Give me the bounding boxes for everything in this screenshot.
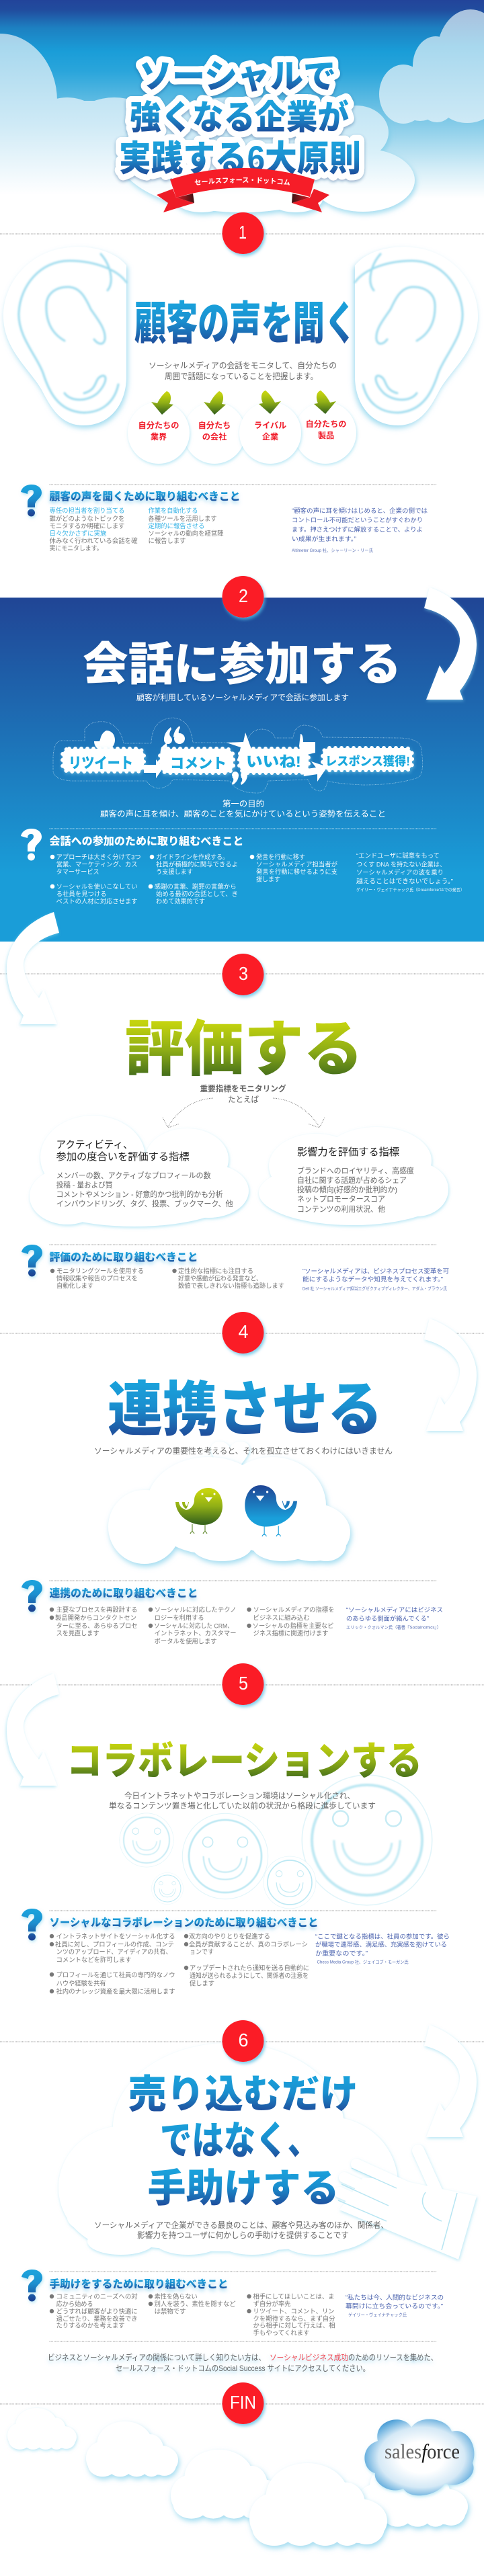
- section 6 intro: 影響力を持つユーザに何かしらの手助けを提供することです: [137, 2231, 349, 2240]
- text: activity metrics: [56, 1139, 233, 1208]
- heading: section 1 actions: 顧客の声を聞くために取り組むべきこと: [50, 490, 241, 503]
- text: section 3 actions: 情報収集や報告のプロセスを: [56, 1274, 138, 1282]
- text: section 1 actions: 専任の担当者を割り当てる: [50, 507, 125, 514]
- text: influence metrics: 自社に関する話題が占めるシェア: [297, 1175, 407, 1185]
- text: section 4 actions: ソーシャルに対応した CRM、: [154, 1622, 233, 1629]
- text: section 6 actions: 応から始める: [56, 2300, 93, 2308]
- section 6 title: 手助けする: [148, 2167, 339, 2210]
- section 5 intro: 今日イントラネットやコラボレーション環境はソーシャル化され、: [124, 1791, 355, 1800]
- text: section 5 actions: アップデートされたら通知を送る自動的に: [190, 1964, 309, 1972]
- text: section 4 actions: 主要なプロセスを再設計する: [56, 1606, 138, 1613]
- quote: Dell: 能にするようなデータや知見を与えてくれます。”: [302, 1276, 443, 1282]
- text: section 5 actions: イントラネットサイトをソーシャル化する: [56, 1933, 175, 1940]
- text: section 1 actions: 各種ツールを活用します: [148, 515, 216, 522]
- text: influence metrics: ブランドへのロイヤリティ、高感度: [297, 1166, 414, 1175]
- text: section 1 actions: [50, 507, 223, 552]
- number badge 2: 2: [239, 585, 248, 606]
- text: activity metrics: コメントやメンション - 好意的かつ批判的かも分析: [56, 1190, 223, 1199]
- cloud: header left: [0, 34, 175, 218]
- section 3 intro: たとえば: [228, 1095, 259, 1104]
- quote: Altimeter: “顧客の声に耳を傾けはじめると、企業の側では: [292, 507, 428, 514]
- section 1 intro: 周囲で話題になっていることを把握します。: [165, 372, 318, 381]
- main title: ソーシャルで: [139, 58, 336, 95]
- primary goal: [100, 799, 386, 819]
- text: section 2 actions: る社員を見つける: [56, 890, 107, 898]
- ear: left: [3, 247, 126, 425]
- cloud: header right: [379, 9, 484, 124]
- icon: question mark 2: [21, 829, 42, 860]
- text: section 5 actions: ハウや経験を共有: [56, 1980, 106, 1987]
- quote: Qualman: のあらゆる側面が絡んでくる”: [346, 1614, 429, 1622]
- quote: Qualman: エリック・クォルマン氏（著書『Socialnomics』）: [346, 1624, 441, 1630]
- bubbles: monitoring targets: [128, 402, 356, 464]
- text: section 4 actions: ソーシャルメディアの指標を: [253, 1606, 335, 1613]
- text: section 4 actions: ビジネスに組み込む: [253, 1614, 309, 1621]
- cloud: footer 3: [171, 2450, 286, 2519]
- quote: Chess Media: “ここで鍵となる指標は、社員の参加です。彼ら: [315, 1933, 450, 1940]
- ribbon: セールスフォース・ドットコム: [195, 177, 290, 185]
- section 6 title: ではなく、: [160, 2119, 319, 2163]
- text: section 2 actions: わめて効果的です: [156, 898, 205, 905]
- text: influence metrics: ネットプロモータースコア: [297, 1195, 385, 1204]
- text: section 6 actions: ず自分が率先: [253, 2300, 290, 2308]
- section 3 title: 評価する: [125, 1016, 363, 1083]
- heading: section 4 actions: 連携のために取り組むべきこと: [50, 1587, 198, 1599]
- quote: Altimeter: ます。押さえつけずに解放することで、よりよ: [292, 526, 423, 533]
- cloud: footer 1: [7, 2408, 77, 2450]
- text: section 5 actions: コメントなどを許可します: [56, 1956, 132, 1964]
- cloud: footer 2: [86, 2421, 178, 2477]
- text: section 1 actions: 作業を自動化する: [148, 507, 198, 514]
- text: activity metrics: 参加の度合いを評価する指標: [56, 1151, 190, 1163]
- bubbles: monitoring targets: 自分たち: [198, 420, 231, 430]
- text: section 2 actions: ガイドラインを作成する。: [156, 854, 229, 860]
- heading: section 6 actions: 手助けをするために取り組むべきこと: [50, 2278, 229, 2290]
- smileys: [120, 1775, 432, 1909]
- text: section 6 actions: は禁物です: [155, 2308, 186, 2315]
- quote: Gary V 2: ゲイリー・ヴェイナチャック氏: [348, 2312, 407, 2317]
- text: section 6 actions: 別人を装う、素性を隠すなど: [155, 2300, 236, 2308]
- arrow: section 2: [424, 587, 477, 700]
- icon: thumbs up: [299, 734, 315, 756]
- arrow: section 4: [424, 1319, 477, 1431]
- bubbles: monitoring targets: 自分たちの: [306, 419, 346, 429]
- quote: Altimeter: Altimeter Group 社、シャーリーン・リー氏: [292, 547, 373, 553]
- text: influence metrics: 影響力を評価する指標: [297, 1147, 399, 1158]
- arrows: green: [151, 390, 336, 415]
- arrow: section 5: [7, 1673, 59, 1786]
- arrow: section 6: [424, 2025, 477, 2137]
- panel: section 2 blue background: [0, 597, 484, 942]
- quote: Gary V: つくす DNA を持たない企業は、: [356, 860, 446, 868]
- number badge 2: [222, 576, 264, 618]
- cloud: header centre: [118, 97, 415, 212]
- text: section 5 actions: 双方向のやりとりを促進する: [189, 1933, 270, 1940]
- section 6 intro: ソーシャルメディアで企業ができる最良のことは、顧客や見込み客のほか、関係者、: [94, 2220, 389, 2230]
- primary goal: 顧客の声に耳を傾け、顧客のことを気にかけているという姿勢を伝えること: [100, 809, 386, 819]
- text: section 2 actions: 始める最初の会話として、き: [156, 890, 238, 898]
- icon: question mark 6: [22, 2270, 42, 2301]
- pill labels: いいね!: [246, 753, 301, 770]
- dotted arrows: [163, 1098, 325, 1128]
- section 5 title: コラボレーションする: [67, 1739, 422, 1783]
- number badge 6: [222, 2020, 264, 2062]
- text: section 2 actions: タマーサービス: [56, 868, 99, 875]
- quote: Gary V: ソーシャルメディアの波を乗り: [356, 868, 444, 876]
- icon: faint heart: [211, 1442, 249, 1477]
- quote: Gary V: [356, 852, 465, 892]
- section 1 title: 顧客の声を聞く: [134, 298, 356, 349]
- section 5 intro: 単なるコンテンツ置き場と化していた以前の状況から格段に進歩しています: [109, 1801, 376, 1811]
- cloud: footer 4: [249, 2463, 387, 2546]
- ribbon: [157, 168, 329, 212]
- quote: Chess Media: か重要なのです。”: [315, 1949, 368, 1957]
- text: section 4 actions: ロジーを利用する: [155, 1614, 204, 1621]
- text: section 4 actions: イントラネット、カスタマー: [155, 1629, 237, 1637]
- text: section 2 actions: ソーシャルを使いこなしてい: [56, 883, 138, 890]
- quote: Dell: [302, 1268, 449, 1292]
- closing text: のためのリソースを集めた、: [348, 2353, 438, 2362]
- pill labels: [69, 753, 410, 772]
- text: section 4 actions: 製品開発からコンタクトセン: [55, 1614, 136, 1621]
- text: section 3 actions: 自動化します: [56, 1282, 93, 1289]
- number badge 5: 5: [239, 1673, 248, 1694]
- text: activity metrics: アクティビティ、: [56, 1139, 133, 1151]
- icon: hand: [338, 2151, 477, 2259]
- icon: retweet hand: [227, 733, 253, 761]
- quote: Gary V: 越えることはできないでしょう。”: [356, 878, 453, 884]
- section 3 intro: [200, 1084, 286, 1104]
- main title: [119, 58, 361, 179]
- number badge 6: 6: [238, 2030, 249, 2050]
- text: section 6 actions: 手もやってくれます: [253, 2329, 309, 2336]
- ear: right: [355, 247, 478, 425]
- section 1 intro: [149, 361, 337, 381]
- header sky background: [0, 0, 484, 198]
- icon: bird: [94, 731, 115, 755]
- quote: Chess Media: が職場で連帯感、満足感、充実感を抱けている: [315, 1941, 447, 1948]
- cloud: right metrics: [259, 1127, 448, 1225]
- text: section 2 actions: [50, 854, 338, 905]
- text: section 2 actions: ソーシャルメディア担当者が: [256, 860, 338, 868]
- section 6 title: [128, 2073, 358, 2210]
- text: section 2 actions: 援します: [256, 875, 280, 883]
- text: section 2 actions: 発言を行動に移す: [256, 854, 305, 860]
- heading: section 2 actions: 会話への参加のために取り組むべきこと: [50, 835, 243, 847]
- text: influence metrics: コンテンツの利用状況、他: [297, 1204, 385, 1214]
- engagement diagram: [53, 718, 423, 793]
- text: section 5 actions: 全員が貢献することが、真のコラボレーシ: [189, 1941, 308, 1948]
- primary goal: 第一の目的: [223, 799, 264, 808]
- section 4 title: 連携させる: [108, 1376, 382, 1443]
- section 2 title: 会話に参加する: [83, 639, 401, 690]
- cloud: left metrics: [30, 1116, 249, 1227]
- text: section 5 actions: 社内のナレッジ資産を最大限に活用します: [56, 1988, 175, 1995]
- text: section 3 actions: 好意や感動が伝わる発言など、: [178, 1274, 262, 1282]
- text: section 4 actions: ポータルを使用します: [155, 1637, 217, 1645]
- number badge 4: [222, 1312, 264, 1354]
- text: section 4 actions: スを見直します: [56, 1629, 99, 1637]
- text: section 3 actions: 数値で表しきれない指標も追跡します: [178, 1282, 284, 1289]
- main title: 実践する6大原則: [119, 139, 361, 179]
- text: section 5 actions: ンツのアップロード、アイディアの共有、: [56, 1948, 172, 1956]
- text: influence metrics: 投稿の傾向(好感的か批判的か): [297, 1185, 397, 1194]
- section 4 intro: ソーシャルメディアの重要性を考えると、それを孤立させておくわけにはいきません: [94, 1446, 393, 1456]
- cloud: footer 5: [356, 2460, 468, 2527]
- quote: Altimeter: コントロール不可能だということがすぐわかり: [292, 516, 423, 524]
- bubbles: monitoring targets: の会社: [202, 431, 227, 442]
- icon: blue bird: [245, 1485, 297, 1536]
- text: section 6 actions: 素性を偽らない: [155, 2293, 198, 2300]
- number badge 1: [222, 212, 264, 254]
- main title: 強くなる企業が: [130, 99, 349, 136]
- quote: Dell: “ソーシャルメディアは、ビジネスプロセス変革を可: [302, 1268, 449, 1274]
- text: section 1 actions: 実にモニタします。: [50, 544, 102, 552]
- connecting arrows: [144, 759, 327, 782]
- text: section 4 actions: ジネス指標に関連付けます: [253, 1629, 328, 1637]
- text: section 5 actions: プロフィールを通じて社員の専門的なノウ: [56, 1971, 175, 1979]
- text: section 5 actions: ョンです: [190, 1948, 214, 1956]
- text: section 1 actions: 定期的に報告させる: [148, 522, 204, 530]
- text: section 4 actions: ターに至る、あらゆるプロセ: [56, 1622, 138, 1629]
- quote: Altimeter: い成果が生まれます。”: [292, 535, 356, 542]
- bubbles: monitoring targets: ライバル: [254, 421, 286, 430]
- text: section 2 actions: ベストの人材に対応させます: [56, 898, 138, 905]
- text: section 1 actions: 休みなく行われている会話を確: [50, 537, 137, 544]
- text: influence metrics: [297, 1147, 414, 1214]
- number badge 5: [222, 1663, 264, 1705]
- text: section 6 actions: [50, 2293, 335, 2336]
- closing text: セールスフォース・ドットコムのSocial Success サイトにアクセスしてください。: [116, 2364, 370, 2373]
- quote: Chess Media: Chess Media Group 社、ジェイコブ・モーガン氏: [317, 1958, 409, 1965]
- section 6 title: 売り込むだけ: [128, 2073, 358, 2116]
- text: section 5 actions: [50, 1933, 309, 1995]
- text: section 2 actions: 感謝の言葉、謝罪の言葉から: [155, 883, 237, 890]
- section 2 intro: 顧客が利用しているソーシャルメディアで会話に参加します: [136, 693, 349, 702]
- closing text: ソーシャルビジネス成功: [270, 2354, 348, 2362]
- cloud: section 6: [58, 2043, 398, 2255]
- icon: question mark 3: [22, 1245, 42, 1277]
- text: section 6 actions: リツイート、コメント、リン: [253, 2308, 335, 2315]
- heading: section 3 actions: 評価のために取り組むべきこと: [50, 1251, 198, 1263]
- text: section 2 actions: 発言を行動に移せるように支: [256, 868, 337, 875]
- closing text: [48, 2353, 438, 2373]
- text: section 2 actions: アプローチは大きく分けて3つ: [56, 854, 141, 860]
- number badge 4: 4: [238, 1321, 249, 1342]
- quote: Qualman: “ソーシャルメディアにはビジネス: [346, 1606, 443, 1613]
- text: section 4 actions: ソーシャルの指標を主要なビ: [253, 1622, 333, 1629]
- text: section 5 actions: 通知が送られるようにして、関係者の注意を: [190, 1972, 309, 1979]
- quote: Chess Media: [315, 1933, 450, 1965]
- section 1 intro: ソーシャルメディアの会話をモニタして、自分たちの: [149, 361, 337, 370]
- text: activity metrics: 投稿 - 量および質: [56, 1180, 113, 1190]
- number badge 3: 3: [239, 963, 248, 984]
- cloud: birds: [108, 1457, 350, 1564]
- quote: Gary V 2: [346, 2293, 444, 2317]
- text: section 6 actions: クを期待するなら、まず自分: [253, 2315, 335, 2323]
- text: section 2 actions: 社員が積極的に関与できるよ: [156, 860, 238, 868]
- section 3 intro: 重要指標をモニタリング: [200, 1084, 286, 1093]
- icon: question mark 4: [22, 1580, 42, 1612]
- number badge FIN: FIN: [230, 2392, 256, 2413]
- icon: question mark 5: [22, 1909, 42, 1941]
- logo: salesforce: [364, 2419, 474, 2495]
- text: section 6 actions: コミュニティのニーズへの対: [56, 2293, 138, 2300]
- bubbles: monitoring targets: 企業: [262, 431, 278, 442]
- text: section 2 actions: 営業、マーケティング、カス: [56, 860, 138, 868]
- number badge FIN: [222, 2382, 264, 2424]
- text: section 1 actions: モニタするか明確にします: [50, 522, 125, 530]
- text: section 1 actions: 誰がどのようなトピックを: [50, 515, 125, 522]
- icon: open quote: [160, 726, 185, 766]
- bubbles: monitoring targets: 業界: [151, 431, 167, 442]
- text: section 6 actions: から相手に対して行えば、相: [253, 2321, 335, 2329]
- text: section 4 actions: ソーシャルに対応したテクノ: [155, 1606, 237, 1613]
- text: section 3 actions: [50, 1268, 284, 1289]
- quote: Dell: Dell 社 ソーシャルメディア担当エグゼクティブディレクター、アダム・ブラウン氏: [302, 1285, 447, 1292]
- pills: [63, 748, 412, 773]
- text: section 6 actions: 過ごせたり、業務を改善でき: [56, 2315, 138, 2323]
- text: section 5 actions: 促します: [190, 1980, 214, 1987]
- section 6 intro: [94, 2220, 389, 2240]
- number badge 3: [222, 954, 264, 995]
- text: section 5 actions: 社員に対し、プロフィールの作成、コンテ: [55, 1941, 174, 1948]
- text: section 4 actions: [50, 1606, 335, 1645]
- icon: green bird: [175, 1488, 223, 1534]
- quote: Gary V 2: 幕開けに立ち会っているのです。”: [346, 2302, 443, 2309]
- section 5 intro: [109, 1791, 376, 1811]
- icon: close quote: [232, 772, 247, 785]
- text: section 3 actions: モニタリングツールを使用する: [56, 1268, 144, 1274]
- quote: Altimeter: [292, 507, 428, 553]
- text: activity metrics: インバウンドリング、タグ、投票、ブックマーク、他: [56, 1199, 233, 1208]
- pill labels: リツイート: [69, 755, 133, 772]
- quote: Qualman: [346, 1606, 443, 1630]
- heading: section 5 actions: ソーシャルなコラボレーションのために取り組むべきこと: [50, 1917, 319, 1929]
- text: section 1 actions: 日々欠かさずに実施: [50, 530, 107, 537]
- quote: Gary V 2: “私たちは今、人間的なビジネスの: [346, 2293, 444, 2301]
- logo: salesforce: salesforce: [385, 2440, 460, 2463]
- pill labels: コメント: [170, 756, 227, 772]
- pill labels: レスポンス獲得!: [325, 754, 410, 768]
- text: section 3 actions: 定性的な指標にも注目する: [178, 1268, 253, 1274]
- icon: question mark 1: [21, 485, 42, 516]
- bubbles: monitoring targets: 製品: [318, 430, 334, 440]
- arrow: section 3: [7, 912, 59, 1024]
- text: section 6 actions: たりするのかを考えます: [56, 2321, 125, 2329]
- text: section 1 actions: ソーシャルの動向を経営陣: [148, 530, 223, 537]
- text: section 6 actions: 相手にしてほしいことは、ま: [253, 2293, 335, 2300]
- number badge 1: 1: [239, 222, 247, 243]
- text: activity metrics: メンバーの数、アクティブなプロフィールの数: [56, 1171, 211, 1180]
- quote: Gary V: “エンドユーザに誠意をもって: [356, 852, 440, 859]
- quote: Gary V: ゲイリー・ヴェイナチャック氏（Dreamforce'11での発言）: [356, 886, 465, 892]
- text: section 1 actions: に報告します: [148, 537, 186, 544]
- closing text: ビジネスとソーシャルメディアの関係について詳しく知りたい方は、: [48, 2353, 266, 2362]
- text: section 6 actions: どうすれば顧客がより快適に: [56, 2308, 138, 2315]
- bubbles: monitoring targets: 自分たちの: [138, 420, 179, 430]
- text: section 2 actions: う支援します: [156, 868, 193, 875]
